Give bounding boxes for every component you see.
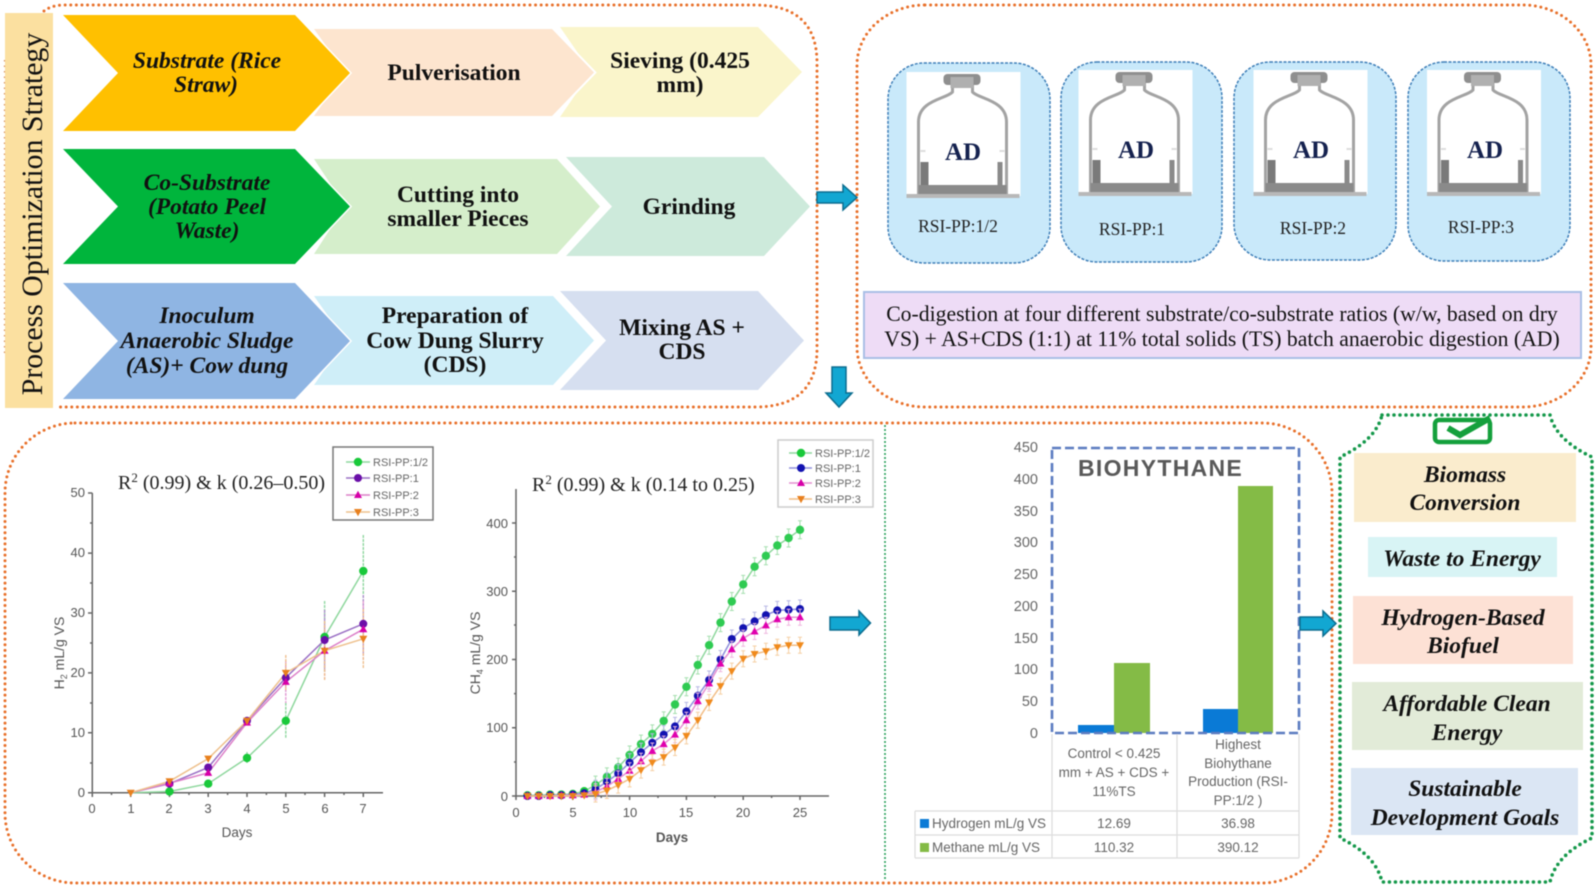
row: substrate rice straw: mm) <box>657 72 703 98</box>
callout: co-digestion description <box>864 292 1581 358</box>
data table: Control < 0.425 <box>1068 746 1160 761</box>
panel: results <box>5 423 1332 883</box>
panel: preparation of substrates <box>4 5 817 408</box>
bars <box>1078 486 1273 733</box>
legend: RSI-PP:1 <box>815 463 861 475</box>
card: RSI-PP 1/2: AD <box>945 139 981 166</box>
row: substrate rice straw: Sieving (0.425 <box>610 48 750 74</box>
row: substrate rice straw: Substrate (Rice <box>133 48 281 74</box>
line chart: methane yield: 200 <box>486 652 508 667</box>
line chart: methane yield: Days <box>656 830 688 845</box>
row: substrate rice straw: Straw) <box>174 72 238 98</box>
line chart: hydrogen yield: 20 <box>71 665 85 680</box>
legend: RSI-PP:1 <box>373 473 419 485</box>
card: RSI-PP 1/2 <box>888 63 1050 263</box>
line chart: methane yield: 20 <box>736 805 750 820</box>
legend <box>778 440 873 507</box>
highlight frame <box>1052 448 1299 733</box>
row: co-substrate potato peel waste <box>63 149 810 264</box>
card: RSI-PP 2 <box>1234 62 1396 260</box>
row: co-substrate potato peel waste: (Potato Peel <box>148 194 267 220</box>
row: co-substrate potato peel waste: Grinding <box>643 194 736 220</box>
line chart: hydrogen yield: 40 <box>71 545 85 560</box>
row: inoculum: CDS <box>658 339 706 365</box>
row: inoculum: (CDS) <box>424 352 486 378</box>
bar chart: biohythane: 250 <box>1014 567 1038 583</box>
line chart: hydrogen yield: 4 <box>243 801 251 816</box>
box: sustainable development goals: Sustainable <box>1408 776 1522 802</box>
line chart: methane yield: 0 <box>501 789 508 804</box>
card: RSI-PP 3: AD <box>1467 137 1503 164</box>
box: biomass conversion: Biomass <box>1423 462 1506 488</box>
arrow: preparation to co-digestion <box>817 185 857 210</box>
arrow: charts to biohythane <box>830 611 870 635</box>
icon: check badge <box>1435 418 1490 442</box>
legend: RSI-PP:1/2 <box>815 448 870 460</box>
bar chart: biohythane <box>915 440 1299 858</box>
chart title: 2 <box>545 472 552 487</box>
callout: co-digestion description: VS) + AS+CDS (1:1) at 11% total solids (TS) batch anaerobic digestion (AD) <box>884 327 1560 351</box>
chart title: (0.99) & k (0.14 to 0.25) <box>552 474 755 496</box>
row: co-substrate potato peel waste: Co-Substrate <box>144 170 270 196</box>
row: inoculum: Anaerobic Sludge <box>118 328 294 354</box>
line chart: methane yield <box>467 440 873 845</box>
line chart: methane yield: 10 <box>623 805 637 820</box>
bar chart: biohythane: 300 <box>1014 535 1038 551</box>
line chart: hydrogen yield: 5 <box>282 801 290 816</box>
line chart: methane yield: 100 <box>486 720 508 735</box>
line chart: methane yield: 400 <box>486 516 508 531</box>
sidebar: process optimization strategy: Process Optimization Strategy <box>16 33 49 395</box>
row: co-substrate potato peel waste: Waste) <box>175 218 239 244</box>
line chart: hydrogen yield: Days <box>222 825 253 840</box>
box: affordable clean energy: Affordable Clean <box>1381 691 1551 717</box>
box: waste to energy <box>1368 537 1557 577</box>
line chart: methane yield: 300 <box>486 584 508 599</box>
row: co-substrate potato peel waste: Cutting into <box>397 182 519 208</box>
arrow: results to outcomes <box>1300 611 1336 636</box>
line chart: hydrogen yield: 1 <box>127 801 135 816</box>
data table: 110.32 <box>1094 840 1134 855</box>
row: co-substrate potato peel waste: smaller Pieces <box>387 206 529 232</box>
bar chart: biohythane: 0 <box>1030 726 1038 742</box>
box: hydrogen-based biofuel: Hydrogen-Based <box>1380 605 1546 631</box>
box: waste to energy: Waste to Energy <box>1383 546 1541 572</box>
line chart: hydrogen yield: 50 <box>71 485 85 500</box>
error bars <box>247 535 363 764</box>
box: sustainable development goals <box>1351 768 1578 835</box>
chart title: (0.99) & k (0.26–0.50) <box>138 472 325 494</box>
line chart: hydrogen yield: 7 <box>359 801 367 816</box>
data table: Production (RSI- <box>1188 774 1288 789</box>
box: hydrogen-based biofuel: Biofuel <box>1426 633 1499 659</box>
data table: 36.98 <box>1221 816 1255 831</box>
row: substrate rice straw <box>63 15 802 131</box>
card: RSI-PP 2: AD <box>1293 137 1329 164</box>
line chart: hydrogen yield: 6 <box>321 801 329 816</box>
data table: 390.12 <box>1217 840 1259 855</box>
box: sustainable development goals: Development Goals <box>1370 805 1559 831</box>
line chart: methane yield: 0 <box>512 805 520 820</box>
card: RSI-PP 1: RSI-PP:1 <box>1099 219 1165 239</box>
bar chart: biohythane: 100 <box>1014 662 1038 678</box>
legend: RSI-PP:2 <box>373 490 419 502</box>
line chart: hydrogen yield: 2 <box>165 801 173 816</box>
chart title: R <box>118 472 131 494</box>
data table: PP:1/2 ) <box>1214 793 1262 808</box>
series markers <box>127 567 367 797</box>
box: affordable clean energy <box>1352 682 1583 750</box>
line chart: hydrogen yield: 2 <box>59 674 69 679</box>
line chart: hydrogen yield: 30 <box>71 605 85 620</box>
data table: 12.69 <box>1097 816 1131 831</box>
bar chart: biohythane: 50 <box>1022 694 1038 710</box>
series lines <box>131 571 363 793</box>
bar chart: biohythane: 150 <box>1014 631 1038 647</box>
row: substrate rice straw: Pulverisation <box>387 60 521 86</box>
card: RSI-PP 3 <box>1408 62 1570 261</box>
card: RSI-PP 3: RSI-PP:3 <box>1448 217 1514 237</box>
line chart: methane yield: 25 <box>793 805 807 820</box>
bar chart: biohythane: 400 <box>1014 472 1038 488</box>
series: RSI-PP 2 <box>523 609 804 800</box>
line chart: methane yield: 5 <box>569 805 577 820</box>
row: inoculum: (AS)+ Cow dung <box>126 353 288 379</box>
bar chart: biohythane: 200 <box>1014 599 1038 615</box>
row: inoculum: Mixing AS + <box>619 315 745 341</box>
box: affordable clean energy: Energy <box>1431 720 1503 746</box>
sidebar: process optimization strategy <box>5 13 53 408</box>
line chart: methane yield: 4 <box>475 669 485 674</box>
data table: mm + AS + CDS + <box>1059 765 1169 780</box>
data table: Methane mL/g VS <box>932 840 1040 855</box>
card: RSI-PP 2: RSI-PP:2 <box>1280 218 1346 238</box>
row: inoculum <box>63 283 804 399</box>
row: inoculum: Preparation of <box>382 303 529 329</box>
line chart: hydrogen yield: mL/g VS <box>51 617 67 674</box>
bar chart: biohythane: 450 <box>1014 440 1038 456</box>
card: RSI-PP 1: AD <box>1118 137 1154 164</box>
heading: biohythane: BIOHYTHANE <box>1078 455 1243 481</box>
line chart: methane yield: CH <box>467 674 483 694</box>
legend: RSI-PP:3 <box>815 494 861 506</box>
line chart: hydrogen yield <box>51 447 433 840</box>
line chart: hydrogen yield: H <box>51 679 67 689</box>
box: biomass conversion <box>1354 453 1576 522</box>
data table: 11%TS <box>1092 784 1136 799</box>
legend: RSI-PP:2 <box>815 478 861 490</box>
legend: RSI-PP:1/2 <box>373 457 428 469</box>
line chart: methane yield: mL/g VS <box>467 612 483 669</box>
series: RSI-PP 1/2 <box>523 521 804 800</box>
card: RSI-PP 1/2: RSI-PP:1/2 <box>918 216 998 236</box>
line chart: hydrogen yield: 10 <box>71 725 85 740</box>
data table: Biohythane <box>1204 756 1272 771</box>
data table: Hydrogen mL/g VS <box>932 816 1046 831</box>
panel: outcomes <box>1340 415 1592 882</box>
row: inoculum: Inoculum <box>158 303 255 329</box>
box: biomass conversion: Conversion <box>1410 490 1520 516</box>
card: RSI-PP 1 <box>1061 62 1222 262</box>
series: RSI-PP 3 <box>523 637 804 802</box>
line chart: methane yield: 15 <box>679 805 693 820</box>
callout: co-digestion description: Co-digestion at four different substrate/co-substrate ratios (w/w, based on dry <box>886 302 1558 326</box>
panel: co-digestion ratios <box>857 5 1591 407</box>
bar chart: biohythane: 350 <box>1014 504 1038 520</box>
data table <box>915 734 1299 858</box>
chart title: R <box>532 474 545 496</box>
legend: RSI-PP:3 <box>373 507 419 519</box>
line chart: hydrogen yield: 0 <box>88 801 96 816</box>
line chart: hydrogen yield: 3 <box>204 801 212 816</box>
legend <box>333 447 433 520</box>
chart title: 2 <box>131 470 138 485</box>
arrow: down to results <box>826 367 852 407</box>
row: inoculum: Cow Dung Slurry <box>366 328 544 354</box>
box: hydrogen-based biofuel <box>1353 596 1573 664</box>
data table: Highest <box>1215 737 1261 752</box>
line chart: hydrogen yield: 0 <box>78 785 85 800</box>
series: RSI-PP 1 <box>523 600 804 800</box>
